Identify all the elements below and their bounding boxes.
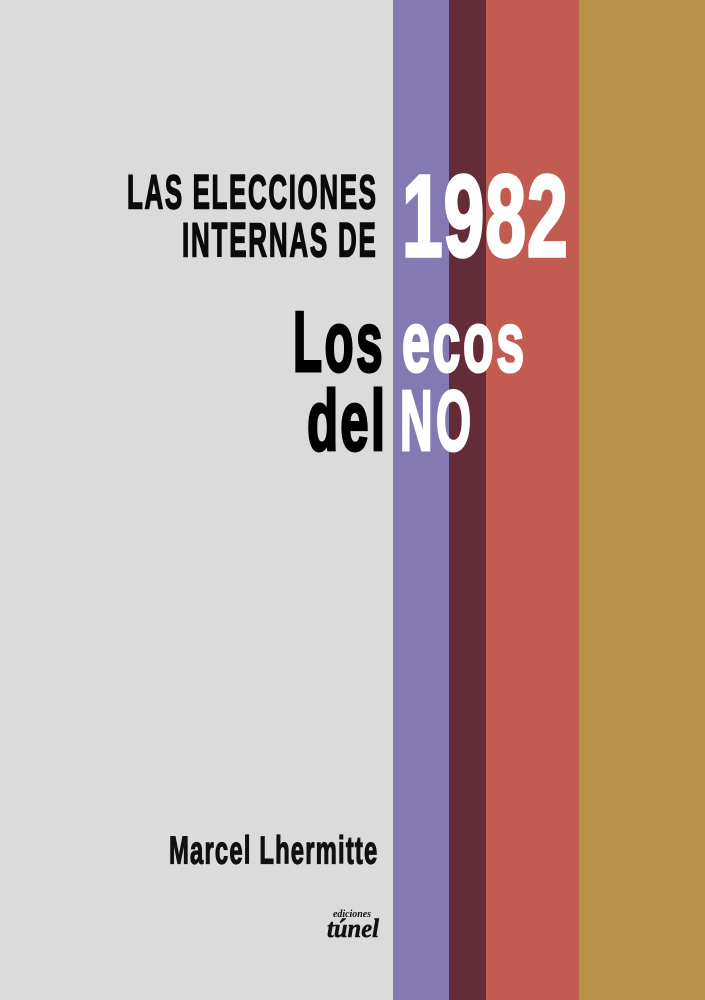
author name: Marcel Lhermitte <box>169 829 377 872</box>
stripe: red <box>486 0 579 1000</box>
title: ecos no: NO <box>400 374 471 469</box>
stripe: gold <box>579 0 705 1000</box>
heading: year 1982: 1982 <box>402 151 568 281</box>
title: los del: del <box>307 374 385 468</box>
title: los del: Los <box>293 294 383 390</box>
title: ecos no <box>400 294 524 469</box>
heading: las elecciones internas de <box>127 166 376 268</box>
heading: las elecciones internas de: INTERNAS DE <box>182 214 376 268</box>
panel: grey background <box>0 0 393 1000</box>
stripe: purple <box>393 0 449 1000</box>
heading: las elecciones internas de: LAS ELECCIONES <box>127 166 376 220</box>
title: los del <box>293 294 385 468</box>
publisher logo: túnel <box>327 914 380 943</box>
stripe: dark maroon <box>449 0 486 1000</box>
title: ecos no: ecos <box>402 294 524 389</box>
publisher logo: ediciones <box>333 909 371 920</box>
